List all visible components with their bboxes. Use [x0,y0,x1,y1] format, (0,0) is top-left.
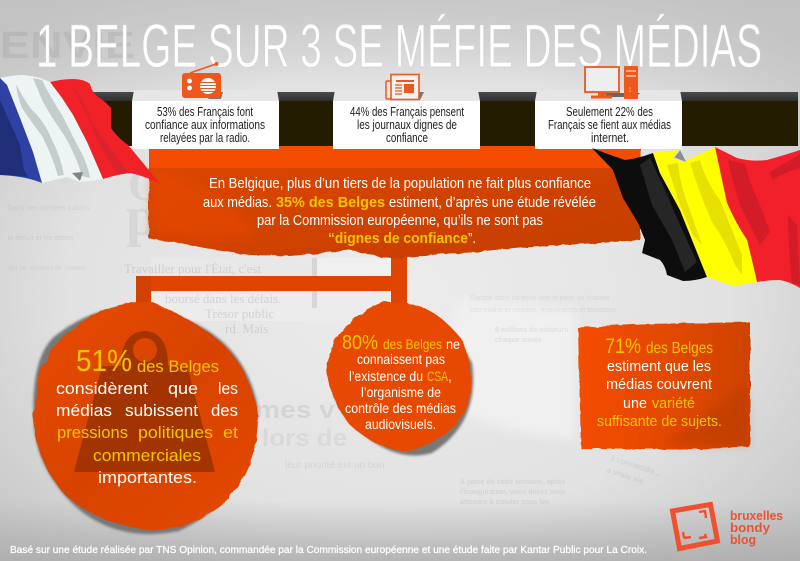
background: newspaper collage: 6 millions de visiteurs [495,327,568,334]
text: justified paragraph: médias [56,401,112,420]
text: 80% circle copy: contrôle des médias [345,400,456,416]
text: 80% circle copy: des Belges [383,336,442,352]
torn circle shadow [330,306,473,456]
main message text: aux médias. [203,194,272,211]
text: 80% circle copy: l’organisme de [361,384,441,400]
text: justified paragraph: considèrent [56,379,148,398]
black band [90,92,798,146]
text: 80% circle copy: CSA [427,368,448,384]
main message text [203,175,596,247]
card: internet statistic: internet. [591,131,629,145]
text: 80% circle copy: connaissent pas [357,351,445,367]
text: 80% circle copy: l’existence du [349,368,423,384]
flag stripe: red [50,79,160,184]
background: newspaper collage: A partir de cette semaine, après [460,479,566,486]
text: justified paragraph: importantes. [98,468,197,487]
main message text: estiment, d’après une étude révélée [389,194,596,211]
background: newspaper collage: Trésor public [205,306,274,321]
torn rectangle [578,322,750,449]
torn circle [33,302,258,530]
text: justified paragraph: des [211,401,238,420]
text: 80% circle copy: ne [446,336,460,352]
background: newspaper collage: Q [128,159,164,210]
card: internet statistic: Français se fient aux médias [548,118,671,132]
card: newspaper statistic: confiance [386,131,428,145]
text: 80% circle copy [342,332,460,432]
card: newspaper statistic: 44% des Français pensent [350,105,464,119]
background: newspaper collage: chaque année [495,337,542,344]
main message text: par la Commission européenne, qu’ils ne sont pas [257,212,543,229]
logo wordmark: bondy [730,520,771,535]
card: newspaper statistic [333,90,480,149]
card: radio statistic [132,90,279,149]
text: 80% circle copy: 80% [342,332,378,354]
text: 51% des Belges: des Belges [137,357,219,376]
statistic: 80% circle [327,302,473,456]
text: justified paragraph: les [218,379,238,398]
icon: radio [182,62,223,99]
background: newspaper collage: qui ne cessent de monter [8,265,87,272]
flag stripe: yellow [653,147,757,286]
text: justified paragraph: subissent [125,401,198,420]
background: newspaper collage: mes v [255,397,336,424]
logo: bruxelles bondy blog [672,504,783,548]
background: newspaper collage: leur priorité est un bon [285,460,385,471]
text: 71% panel copy: une [623,395,647,412]
background: newspaper collage: attendre à crouler sous les [460,499,549,506]
background: newspaper collage: l'inauguration, vous devez vous [460,489,566,496]
background: newspaper collage: a vraie vie [605,465,645,486]
text: 51% des Belges: 51% [76,343,132,378]
card: radio statistic: confiance aux informations [145,118,265,132]
background: newspaper collage: Travailler pour l'État, c'est [124,261,261,276]
French flag [0,75,160,184]
logo wordmark: bruxelles [730,508,783,523]
card: internet statistic [535,90,682,149]
source footnote: Basé sur une étude réalisée par TNS Opinion, commandée par la Commission européenne et une étude faite par Kantar Public pour La Croix. [10,544,647,556]
logo wordmark: blog [730,532,756,547]
torn circle shadow [33,307,257,534]
text: justified paragraph [56,379,238,487]
flag stripe: black [592,148,707,281]
background: newspaper collage: Europe dans un écrin vert et plein de charme [470,295,610,302]
background: newspaper collage: Dans ses comptes publics [8,205,90,212]
connector lines between main panel and statistics [136,246,407,316]
background: newspaper collage: boursé dans les délais. [165,291,281,306]
main message text: ”. [468,230,476,247]
text: justified paragraph: pressions [57,423,128,442]
card: newspaper statistic: les journaux dignes de [357,118,457,132]
main message text: En Belgique, plus d’un tiers de la population ne fait plus confiance [209,175,591,192]
Belgian flag [592,147,800,288]
text: 71% panel copy: 71% [605,335,641,358]
text: justified paragraph: que [168,379,198,398]
icon: weight [74,331,215,472]
text: 71% panel copy: estiment que les [607,358,711,375]
icon: newspaper [386,74,424,100]
text: 80% circle copy: audiovisuels. [365,416,436,432]
background: newspaper collage: lors de [262,425,347,452]
text: 71% panel copy: suffisante de sujets. [597,413,722,430]
flag stripe: white [0,75,103,183]
main message text: 35% des Belges [276,194,385,211]
panel: main message background [149,146,640,259]
card: radio statistic: relayées par la radio. [160,131,250,145]
background: newspaper collage: patrimoine et musées, monuments et terrasses [470,307,616,314]
background: newspaper collage: le déficit et les dettes [8,235,74,242]
logo wordmark [730,508,783,547]
background: newspaper collage: p [126,186,157,248]
text: 80% circle copy: , [448,368,452,384]
card: internet statistic: Seulement 22% des [566,105,653,119]
background: newspaper collage: ENVIE [0,25,135,67]
statistic: 51% circle [33,302,258,534]
text: 71% panel copy: des Belges [646,340,713,357]
text: justified paragraph: commerciales [93,446,201,465]
text: justified paragraph: et [223,423,238,442]
flag stripe: blue [0,78,42,183]
background: newspaper collage: z connectés... [609,453,662,478]
icon: computer [585,66,640,99]
background: newspaper collage: rd. Mais [225,321,268,336]
logo mark [672,504,718,548]
torn circle [327,302,471,451]
flag stripe: red [715,147,800,288]
text: 71% panel copy [597,335,722,430]
main message text: “dignes de confiance [328,230,468,247]
text: justified paragraph: politiques [138,423,213,442]
statistic: 71% panel [578,322,750,449]
text: 51% des Belges [76,343,219,378]
text: 71% panel copy: médias couvrent [606,376,713,393]
text: 71% panel copy: variété [652,395,695,412]
card: radio statistic: 53% des Français font [157,105,253,119]
